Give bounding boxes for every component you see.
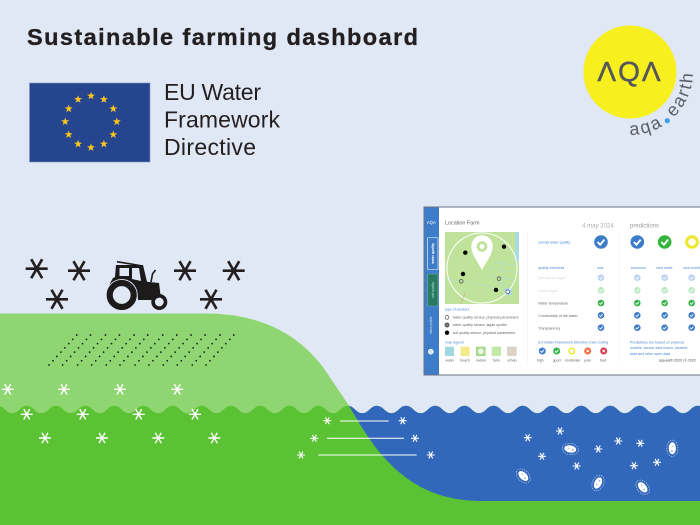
dashboard sidebar: farm profile <box>429 316 433 333</box>
heading: EU Water Framework Directive <box>164 79 280 160</box>
icon: tractor <box>109 262 166 308</box>
sensor legend: type of sensors <box>445 308 470 312</box>
map legend <box>445 340 517 363</box>
dashboard sidebar: ΛQΛ <box>427 220 436 225</box>
EU flag <box>30 83 150 162</box>
colour coding legend: EU Water Framework Directive color coding <box>538 341 608 345</box>
date heading: 4 may 2024 <box>582 224 614 230</box>
dashboard footer: aqa.earth 2023 | ©.2023 <box>659 359 696 363</box>
quality elements table: next week <box>656 266 673 270</box>
map legend: farm <box>493 359 500 363</box>
quality elements table: Water temperature <box>538 302 568 306</box>
overall water quality row <box>538 235 697 249</box>
nutrient runoff arrows <box>297 417 435 458</box>
heading: EU Water Framework Directive: Directive <box>164 134 256 160</box>
farmland hill <box>0 314 356 416</box>
map legend: beach <box>460 359 470 363</box>
dashboard sidebar <box>424 208 439 374</box>
predictions note <box>630 340 689 356</box>
predictions note: Predictions are based on physical <box>630 340 684 344</box>
map legend: urban <box>507 359 517 363</box>
black asterisks in the air <box>26 259 245 309</box>
AQA logo <box>584 26 693 136</box>
algae cells <box>514 440 678 497</box>
map legend: nature <box>476 359 486 363</box>
map legend: water <box>445 359 455 363</box>
predictions note: data and other open data. <box>630 352 671 356</box>
colour coding legend: bad <box>600 358 606 362</box>
predictions note: models, sensor data fusion, weather <box>630 346 689 350</box>
quality elements table: now <box>597 266 604 270</box>
colour coding legend: good <box>553 358 561 362</box>
quality elements table <box>538 266 700 331</box>
title: Sustainable farming dashboard <box>27 24 418 50</box>
quality elements table: Transparency <box>538 326 560 330</box>
location heading: Location Farm <box>445 221 480 227</box>
AQA logo: aqa.earth <box>630 74 693 136</box>
colour coding legend: poor <box>584 358 592 362</box>
colour coding legend: high <box>537 358 544 362</box>
colour coding legend: moderate <box>565 358 580 362</box>
map legend: map legend <box>445 340 464 344</box>
ground <box>0 406 700 525</box>
heading: EU Water Framework Directive: EU Water <box>164 79 261 105</box>
quality elements table: Blue green algae <box>538 276 565 280</box>
map <box>445 232 519 304</box>
column dividers <box>528 232 619 363</box>
white asterisks in the soil <box>2 384 220 443</box>
heading: EU Water Framework Directive: Framework <box>164 106 280 132</box>
predictions heading: predictions <box>630 224 659 230</box>
seed rows <box>49 335 234 365</box>
nutrients in water <box>524 428 661 469</box>
sensor legend: water quality sensor, physical parameters <box>453 316 519 320</box>
colour coding legend <box>537 341 608 362</box>
overall water quality row: overall water quality <box>538 241 570 245</box>
panel: dashboard <box>424 207 700 375</box>
sensor legend <box>445 308 519 335</box>
sensor legend: soil quality sensor, physical parameters <box>453 331 515 335</box>
water body <box>348 406 700 501</box>
quality elements table: Green algae <box>538 289 558 293</box>
quality elements table: quality elements <box>538 266 564 270</box>
quality elements table: tomorrow <box>631 266 646 270</box>
quality elements table: Conductivity of the water <box>538 314 578 318</box>
sensor legend: water quality sensor, algae spotter <box>453 323 508 327</box>
AQA logo: ΛQΛ <box>597 56 663 87</box>
dashboard sidebar: water quality <box>431 243 435 265</box>
dashboard sidebar: soil quality <box>431 282 435 298</box>
